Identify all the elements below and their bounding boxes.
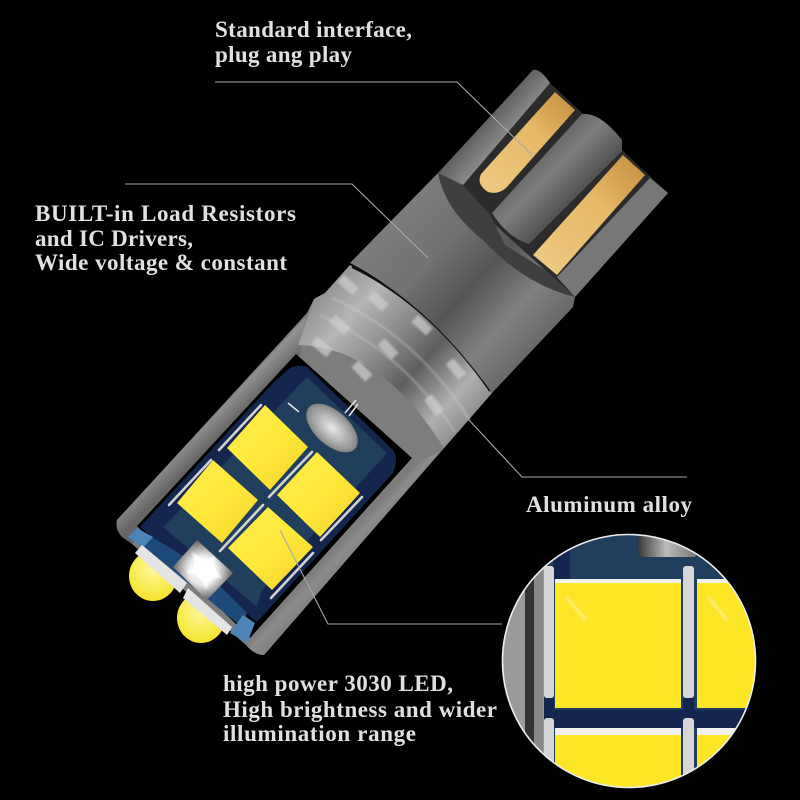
star chip bbox=[173, 540, 233, 600]
dark gap behind prongs bbox=[438, 70, 668, 297]
leader: LED bbox=[280, 530, 502, 624]
circuit board bbox=[128, 366, 396, 643]
window cut-out bbox=[137, 354, 412, 638]
bulb illustration bbox=[117, 70, 668, 655]
LED chip B bbox=[177, 460, 258, 543]
white strip bbox=[135, 545, 232, 635]
icon: yellow lens domes bbox=[129, 551, 225, 643]
lower LED squares bbox=[555, 735, 681, 787]
leader: interface bbox=[215, 82, 532, 155]
text: high power LED: high power 3030 LED, bbox=[223, 671, 453, 696]
gold contact 2 bbox=[533, 155, 645, 275]
left housing prong bbox=[438, 70, 550, 185]
right housing prong bbox=[557, 178, 668, 297]
pins bbox=[544, 566, 554, 698]
polarity marks bbox=[288, 400, 358, 416]
navy gap bbox=[544, 710, 764, 728]
blue end strip bbox=[137, 528, 247, 628]
text: load resistors: Wide voltage & constant bbox=[35, 250, 287, 275]
ribbed aluminum section bbox=[298, 265, 492, 448]
inset zoom circle bbox=[500, 530, 767, 798]
LED chip D bbox=[228, 507, 313, 590]
text: high power LED: illumination range bbox=[223, 721, 416, 746]
text: load resistors: and IC Drivers, bbox=[35, 226, 193, 251]
text: standard interface bbox=[215, 17, 412, 67]
dark end face bbox=[438, 173, 575, 297]
gold contact 1 bbox=[480, 92, 575, 193]
collar bbox=[350, 173, 575, 393]
LED chip A bbox=[227, 405, 308, 490]
text: load resistors: BUILT-in Load Resistors bbox=[35, 201, 296, 226]
leader: aluminum bbox=[455, 405, 687, 477]
plug prongs bbox=[438, 70, 668, 297]
large LED square bbox=[555, 583, 681, 708]
text: standard interface: plug ang play bbox=[215, 42, 352, 67]
text: standard interface: Standard interface, bbox=[215, 17, 412, 42]
bulb tube body bbox=[117, 265, 492, 655]
text: load resistors bbox=[35, 201, 296, 275]
text: aluminum alloy: Aluminum alloy bbox=[526, 492, 692, 517]
middle housing prong bbox=[492, 114, 622, 244]
leader: resistors bbox=[125, 184, 428, 258]
LED chips bbox=[169, 405, 362, 598]
LED chip C bbox=[277, 452, 360, 537]
leader lines bbox=[125, 82, 687, 624]
text: high power LED: High brightness and wider bbox=[223, 697, 497, 722]
text: high power LED bbox=[223, 671, 497, 746]
oval chip bbox=[298, 395, 366, 461]
